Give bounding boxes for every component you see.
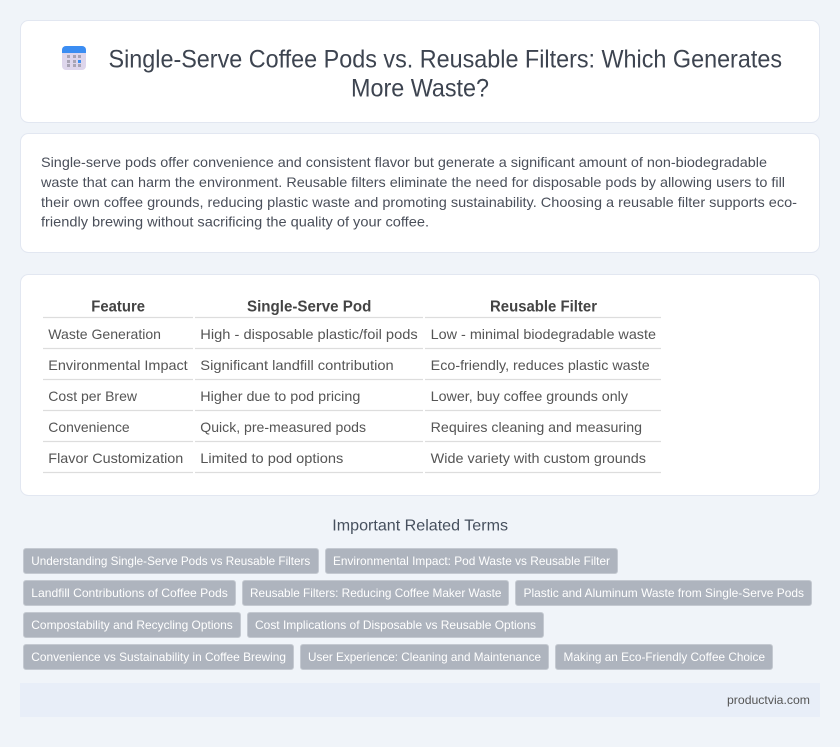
row: convenience — [48, 419, 642, 435]
chip — [24, 644, 294, 670]
row: cost per brew: Lower, buy coffee grounds only — [431, 388, 628, 404]
footer — [20, 683, 820, 717]
footer: productvia.com — [727, 693, 810, 707]
title text: More Waste? — [351, 74, 489, 102]
chip: Compostability and Recycling Options — [31, 618, 233, 632]
row: environmental impact — [48, 357, 650, 373]
chip: Making an Eco-Friendly Coffee Choice — [564, 650, 765, 664]
intro paragraph: waste that can harm the environment. Reusable filters eliminate the need for disposable pods by allowing users to fill — [40, 174, 785, 190]
table header: Single-Serve Pod — [247, 299, 371, 316]
row: convenience: Requires cleaning and measuring — [431, 419, 642, 435]
chip: Convenience vs Sustainability in Coffee Brewing — [31, 650, 286, 664]
chip: Environmental Impact: Pod Waste vs Reusable Filter — [333, 554, 610, 568]
related term chips — [24, 548, 812, 670]
heading: important related terms: Important Related Terms — [332, 518, 508, 535]
row: waste generation: High - disposable plastic/foil pods — [200, 326, 418, 342]
row: flavor customization — [48, 450, 646, 466]
title text: Single-Serve Coffee Pods vs. Reusable Filters: Which Generates — [108, 46, 782, 74]
intro paragraph: Single-serve pods offer convenience and consistent flavor but generate a significant amount of non-biodegradable — [41, 154, 767, 170]
intro paragraph: friendly brewing without sacrificing the quality of your coffee. — [41, 214, 429, 230]
chip — [24, 580, 236, 606]
table header: Reusable Filter — [490, 299, 597, 316]
row: convenience: Convenience — [48, 419, 130, 435]
table header: Feature — [91, 299, 145, 316]
row: cost per brew: Cost per Brew — [48, 388, 138, 404]
row: flavor customization: Wide variety with custom grounds — [431, 450, 646, 466]
chip — [556, 644, 772, 670]
intro paragraph — [40, 154, 797, 230]
row: waste generation: Waste Generation — [48, 326, 161, 342]
row: waste generation: Low - minimal biodegradable waste — [431, 326, 656, 342]
chip — [24, 612, 240, 638]
chip: Cost Implications of Disposable vs Reusable Options — [255, 618, 536, 632]
row: flavor customization: Limited to pod options — [200, 450, 343, 466]
chip — [242, 580, 508, 606]
title text — [108, 46, 782, 102]
chip — [516, 580, 812, 606]
chip — [326, 548, 618, 574]
row: environmental impact: Significant landfill contribution — [200, 357, 394, 373]
chip — [248, 612, 544, 638]
row: environmental impact: Environmental Impact — [48, 357, 188, 373]
row: environmental impact: Eco-friendly, reduces plastic waste — [431, 357, 650, 373]
panel: title — [20, 20, 820, 122]
panel: intro — [20, 134, 820, 252]
chip: User Experience: Cleaning and Maintenance — [308, 650, 541, 664]
row: cost per brew — [48, 388, 628, 404]
chip: Reusable Filters: Reducing Coffee Maker Waste — [250, 586, 502, 600]
chip — [300, 644, 548, 670]
chip: Plastic and Aluminum Waste from Single-Serve Pods — [524, 586, 804, 600]
row: waste generation — [48, 326, 656, 342]
intro paragraph: their own coffee grounds, reducing plastic waste and promoting sustainability. Choosing a reusable filter supports eco- — [41, 194, 797, 210]
chip: Understanding Single-Serve Pods vs Reusable Filters — [31, 554, 310, 568]
table header — [91, 299, 597, 316]
chip: Landfill Contributions of Coffee Pods — [31, 586, 228, 600]
panel: comparison table — [20, 274, 820, 496]
row: flavor customization: Flavor Customization — [48, 450, 183, 466]
row: cost per brew: Higher due to pod pricing — [200, 388, 360, 404]
icon: calendar — [62, 46, 86, 70]
row: convenience: Quick, pre-measured pods — [200, 419, 366, 435]
chip — [24, 548, 318, 574]
